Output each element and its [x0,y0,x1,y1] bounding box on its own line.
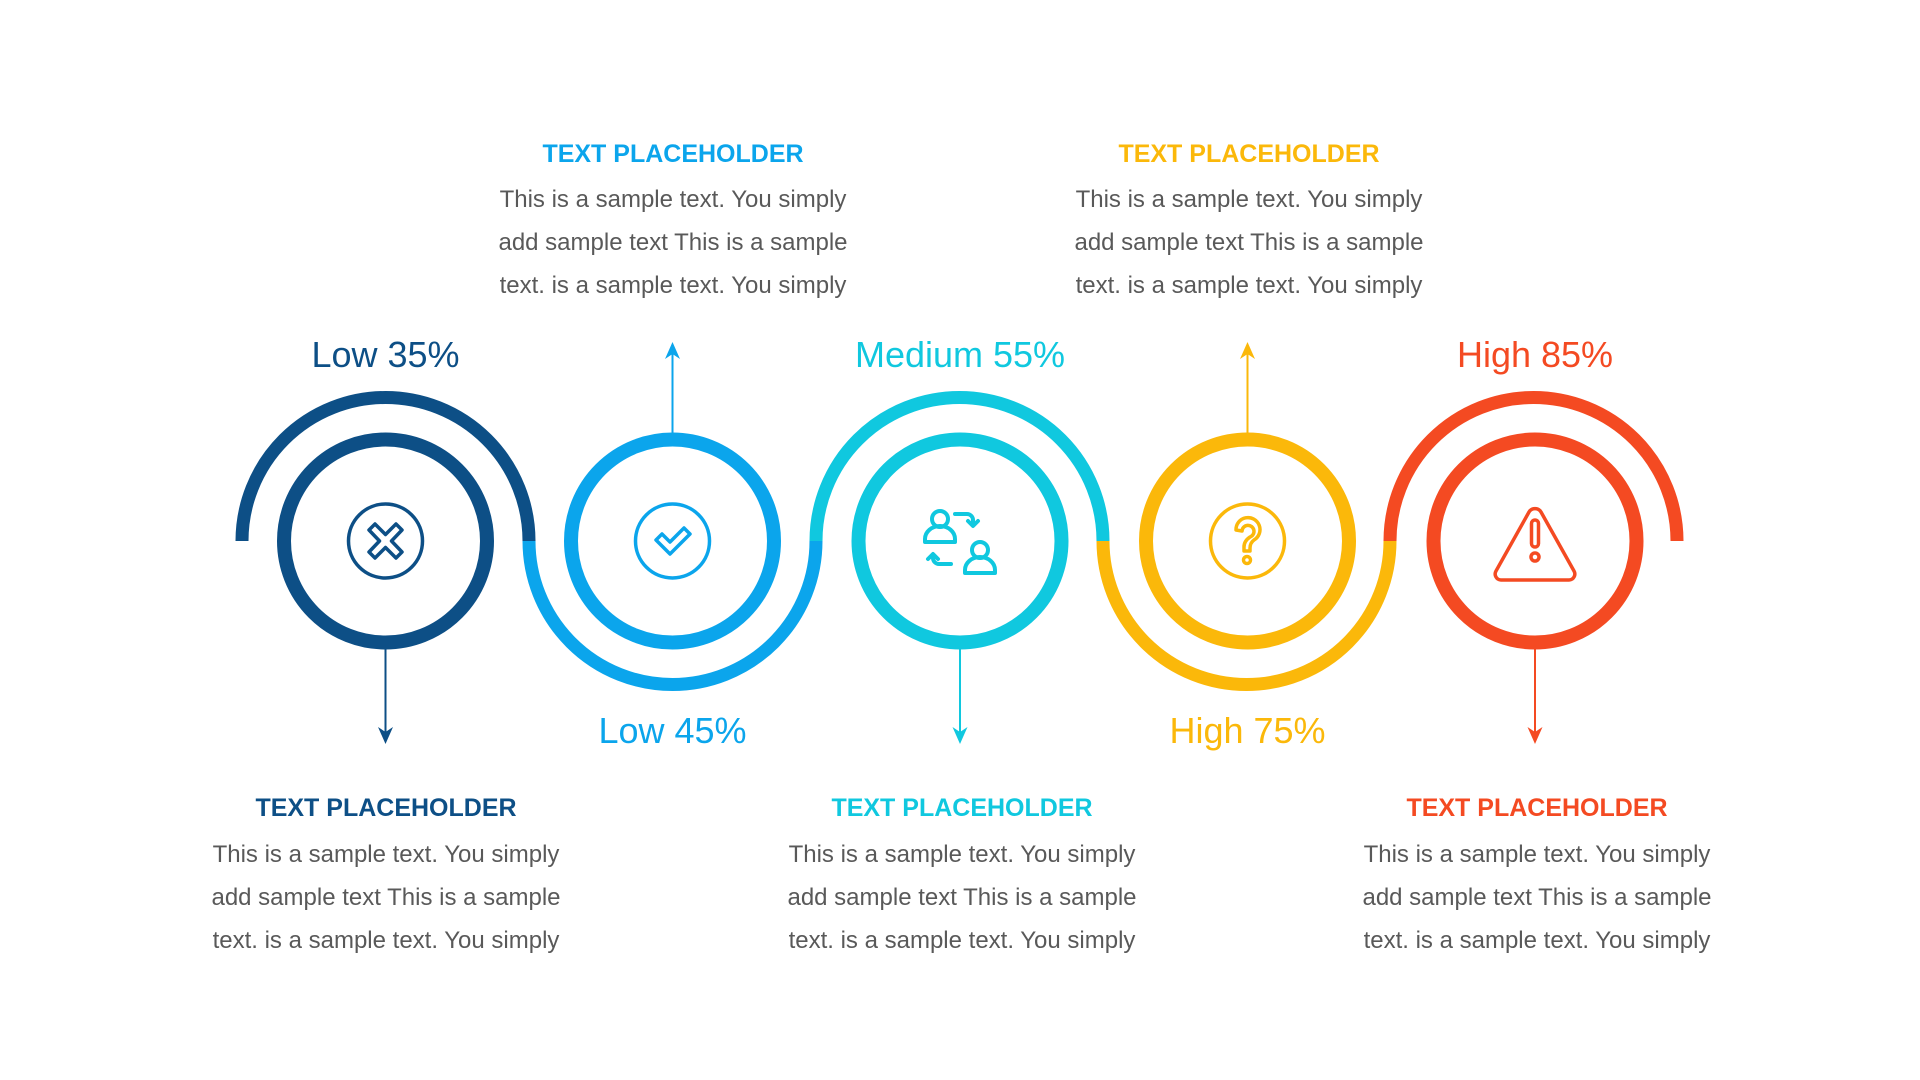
wave path: red top arc [1390,398,1677,541]
text block 3 (bottom): text. is a sample text. You simply [789,927,1135,954]
label: High 85%: High 85% [1457,334,1613,375]
text block 2 (top): add sample text This is a sample [498,229,848,256]
text block 5 (bottom): text. is a sample text. You simply [1364,927,1710,954]
text block 4 (top): TEXT PLACEHOLDER [1118,140,1380,168]
text block 5 (bottom) [1362,794,1712,954]
text block 3 (bottom) [787,794,1137,954]
text block 2 (top) [498,140,848,299]
text block 3 (bottom): TEXT PLACEHOLDER [831,794,1093,822]
infographic [211,140,1712,954]
text block 5 (bottom): TEXT PLACEHOLDER [1406,794,1668,822]
text block 2 (top): This is a sample text. You simply [500,186,846,213]
icon: question [1210,504,1284,578]
label: Low 45%: Low 45% [598,710,747,751]
text block 1 (bottom): add sample text This is a sample [211,884,561,911]
wave path: cyan top arc [816,398,1103,541]
text block 4 (top): add sample text This is a sample [1074,229,1424,256]
arrow 4 up [1240,342,1255,433]
wave path: yellow bottom arc [1103,541,1390,684]
arrow 5 down [1528,649,1542,744]
text block 5 (bottom): add sample text This is a sample [1362,884,1712,911]
text block 4 (top): text. is a sample text. You simply [1076,272,1422,299]
step 2 circle [571,440,774,642]
wave path: navy top arc [242,398,529,541]
text block 2 (top): text. is a sample text. You simply [500,272,846,299]
label: High 75%: High 75% [1169,710,1326,751]
text block 1 (bottom): TEXT PLACEHOLDER [255,794,517,822]
step 3 circle [858,440,1062,642]
icon: warning [1495,509,1575,580]
text block 1 (bottom): text. is a sample text. You simply [213,927,559,954]
label: Low 35%: Low 35% [311,334,460,375]
label: Medium 55%: Medium 55% [855,334,1065,375]
text block 4 (top) [1074,140,1424,299]
icon: x mark [348,504,422,578]
icon: check [636,504,710,578]
text block 3 (bottom): add sample text This is a sample [787,884,1137,911]
step 5 circle [1434,440,1636,642]
text block 1 (bottom) [211,794,561,954]
step 1 circle [284,440,487,642]
arrow 1 down [378,649,393,744]
icon: people exchange [925,511,995,573]
text block 5 (bottom): This is a sample text. You simply [1364,841,1710,868]
arrow 2 up [665,342,680,433]
text block 1 (bottom): This is a sample text. You simply [213,841,559,868]
text block 4 (top): This is a sample text. You simply [1076,186,1422,213]
arrow 3 down [952,649,968,744]
text block 3 (bottom): This is a sample text. You simply [789,841,1135,868]
step 4 circle [1146,440,1349,642]
wave path: blue bottom arc [529,541,816,684]
text block 2 (top): TEXT PLACEHOLDER [542,140,804,168]
